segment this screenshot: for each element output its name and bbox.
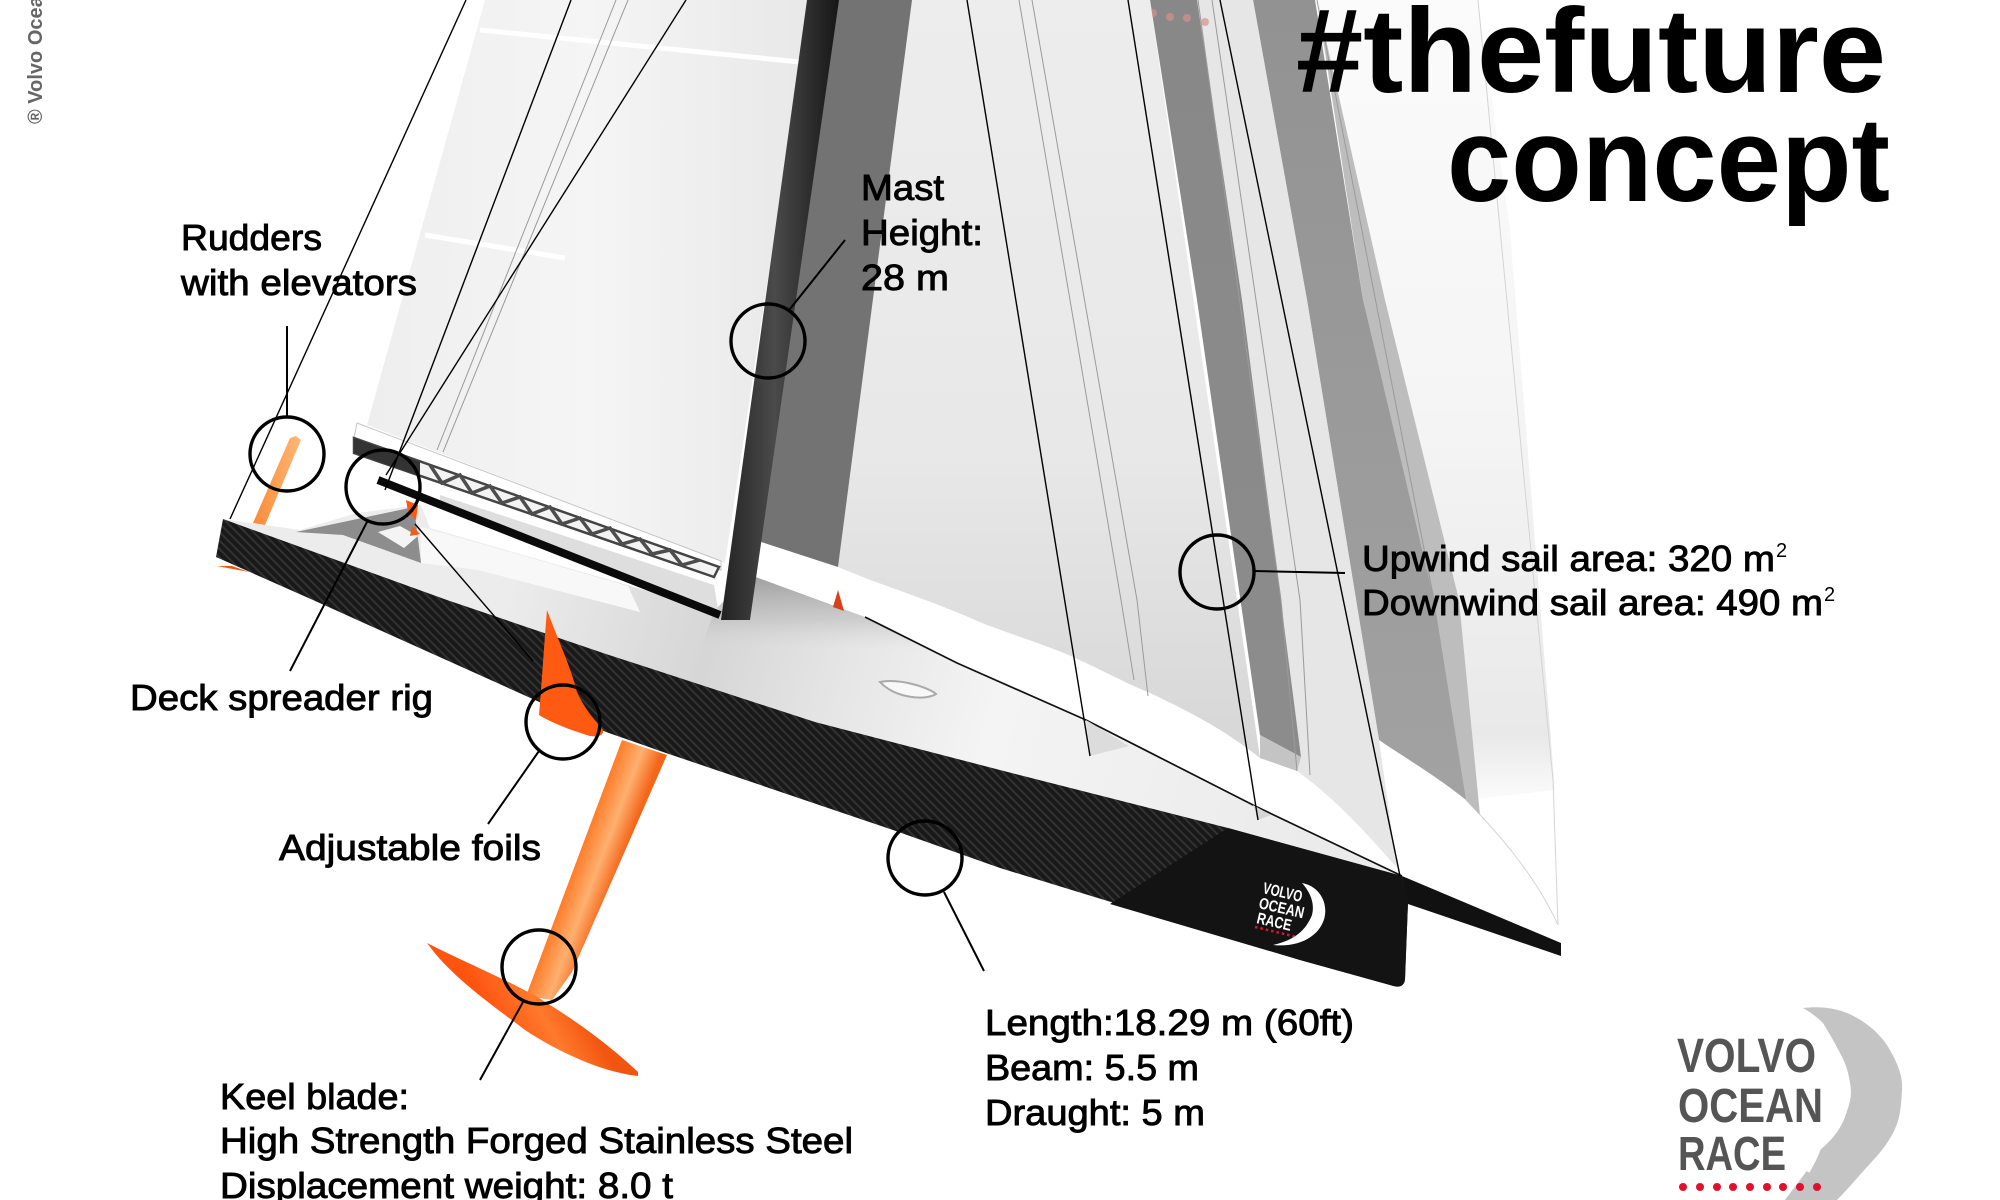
hull side bbox=[216, 519, 1408, 987]
callout: dimensions bbox=[888, 821, 1354, 1133]
white sail stripes bbox=[425, 30, 800, 258]
logo wordmark: OCEAN bbox=[1678, 1080, 1823, 1133]
deck bbox=[223, 505, 1402, 876]
hull bow black area bbox=[1110, 828, 1408, 987]
callout: sail area bbox=[1180, 535, 1835, 623]
callout: deck spreader rig bbox=[130, 450, 433, 718]
deck shadow near mast bbox=[700, 575, 935, 650]
boom upper band bbox=[354, 423, 721, 570]
callout: sail area: Upwind sail area: 320 m bbox=[1362, 538, 1775, 579]
mainsail bbox=[367, 0, 810, 563]
logo wordmark bbox=[1677, 1030, 1823, 1181]
title bbox=[1296, 0, 1890, 227]
callout: rudders bbox=[180, 217, 417, 491]
dark sail panel right bbox=[1253, 0, 1466, 800]
stern red fin bbox=[217, 566, 249, 572]
callout: keel blade: High Strength Forged Stainless Steel bbox=[220, 1120, 853, 1161]
callout: adjustable foils: Adjustable foils bbox=[279, 827, 541, 868]
hull logo bbox=[1255, 880, 1325, 945]
truss zigzag bbox=[430, 465, 700, 565]
callout: adjustable foils bbox=[279, 685, 600, 868]
thin sail seam lines bbox=[437, 0, 1434, 775]
cockpit white wedge bbox=[421, 527, 640, 612]
callout: mast: Mast bbox=[861, 167, 944, 208]
pale sail foot under dark panel bbox=[1260, 735, 1301, 771]
faint red sail dots bbox=[1149, 9, 1209, 26]
callout: dimensions: Draught: 5 m bbox=[985, 1092, 1205, 1133]
callout: rudders: Rudders bbox=[181, 217, 322, 258]
bowsprit bbox=[1402, 876, 1561, 956]
light grey band beside dark panel bbox=[1317, 0, 1480, 815]
hull logo crescent bbox=[1273, 883, 1325, 945]
deck stay fitting aft bbox=[1253, 805, 1271, 820]
title: concept bbox=[1447, 93, 1890, 227]
outer speckled sail bbox=[1313, 0, 1555, 800]
sails bbox=[367, 0, 1558, 925]
boom truss bbox=[354, 438, 719, 577]
main genoa sail bbox=[838, 0, 1260, 758]
orange under boom bbox=[406, 500, 420, 536]
hull logo wordmark: VOLVO bbox=[1261, 880, 1304, 906]
callout: sail area: 2 bbox=[1776, 540, 1787, 562]
callout: rudders: with elevators bbox=[180, 262, 417, 303]
cockpit winch bbox=[378, 526, 418, 548]
hull logo: RACE bbox=[1255, 910, 1293, 935]
callout: keel blade: Keel blade: bbox=[220, 1076, 409, 1117]
keel bulb bbox=[427, 943, 638, 1076]
mast bbox=[721, 0, 839, 620]
rigging lines bbox=[230, 0, 1400, 876]
dark panel behind mast bbox=[755, 0, 912, 567]
rudder bbox=[253, 436, 301, 525]
logo red dots bbox=[1679, 1183, 1821, 1191]
hull logo red dots bbox=[1255, 927, 1297, 937]
deck hatch bbox=[880, 681, 936, 698]
deck edge line bbox=[865, 617, 1402, 876]
logo inner strand bbox=[1808, 1130, 1825, 1172]
red fin far side bbox=[833, 590, 844, 611]
callout: mast: 28 m bbox=[861, 257, 949, 298]
light sail panel middle bbox=[1197, 0, 1397, 868]
hull logo: OCEAN bbox=[1257, 895, 1306, 922]
boom bbox=[354, 423, 721, 615]
callout: keel blade bbox=[220, 930, 853, 1200]
callout: sail area: Downwind sail area: 490 m bbox=[1362, 582, 1823, 623]
keel strut bbox=[526, 740, 667, 1000]
cockpit recess bbox=[296, 507, 421, 563]
logo crescent bbox=[1785, 1007, 1902, 1200]
callout: mast: Height: bbox=[861, 212, 983, 253]
outer sail thin foot line bbox=[1466, 0, 1558, 925]
callout: dimensions: Beam: 5.5 m bbox=[985, 1047, 1199, 1088]
boom lower shade bbox=[440, 495, 718, 610]
boom rail bbox=[378, 480, 720, 615]
callout: dimensions: Length:18.29 m (60ft) bbox=[985, 1002, 1354, 1043]
callout: deck spreader rig: Deck spreader rig bbox=[130, 677, 433, 718]
logo: Volvo Ocean Race bbox=[1677, 1007, 1902, 1200]
logo wordmark: VOLVO bbox=[1677, 1030, 1816, 1083]
adjustable foil bbox=[539, 610, 603, 736]
callout: mast bbox=[731, 167, 983, 378]
dark sail panel middle bbox=[1150, 0, 1301, 757]
callout: sail area: 2 bbox=[1824, 584, 1835, 606]
logo wordmark: RACE bbox=[1678, 1128, 1786, 1181]
deck stay fitting fore bbox=[1086, 720, 1129, 756]
boom dark end bbox=[354, 438, 420, 476]
